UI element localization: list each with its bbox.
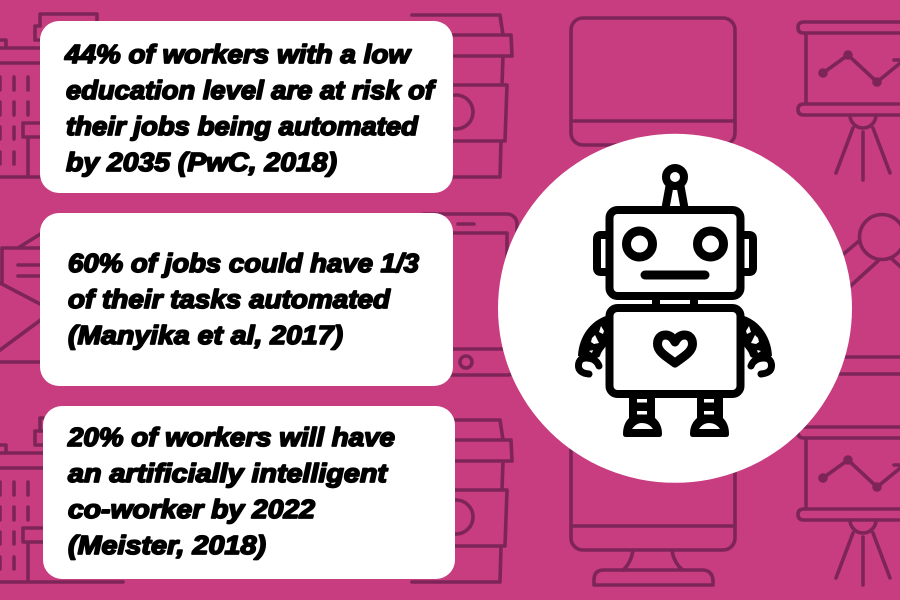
robot left leg (623, 396, 662, 437)
icon: building bottom (0, 418, 123, 582)
robot eyes (626, 231, 724, 257)
robot antenna (666, 168, 684, 208)
icon: monitor top (571, 18, 735, 145)
text: 60 percent statistic (68, 248, 420, 350)
panel: low education statistic (40, 21, 453, 193)
panel: AI co-worker statistic (43, 406, 455, 579)
text: 44 percent statistic (64, 39, 436, 177)
icon: envelope (0, 233, 42, 362)
text: 44 percent statistic: their jobs being automated (66, 111, 419, 141)
text: 60 percent statistic: of their tasks automated (68, 284, 391, 314)
text: 60 percent statistic: (Manyika et al, 2017) (68, 320, 343, 350)
text: 20 percent statistic: (Meister, 2018) (68, 530, 266, 560)
robot neck (652, 298, 698, 306)
text: 44 percent statistic: education level are at risk of (66, 75, 436, 105)
text: 44 percent statistic: 44% of workers with a low (64, 39, 412, 69)
robot ears (597, 235, 753, 272)
panel: robot circle (498, 134, 852, 483)
icon: presentation board bottom (798, 427, 900, 585)
icon: coffee cup top (400, 15, 512, 177)
text: 20 percent statistic: an artificially intelligent (68, 458, 388, 488)
icon: tablet (415, 214, 517, 375)
robot heart (658, 335, 692, 363)
text: 60 percent statistic: 60% of jobs could have 1/3 (68, 248, 420, 278)
text: 20 percent statistic: co-worker by 2022 (68, 494, 316, 524)
icon: network nodes (835, 214, 900, 374)
robot right arm (744, 316, 772, 374)
text: 20 percent statistic (67, 422, 395, 560)
robot right leg (690, 396, 729, 437)
text: 20 percent statistic: 20% of workers will have (67, 422, 395, 452)
robot left arm (578, 316, 606, 374)
icon: building top (0, 14, 97, 177)
robot head (610, 210, 740, 296)
text: 44 percent statistic: by 2035 (PwC, 2018) (66, 147, 337, 177)
icon: monitor bottom (571, 423, 735, 585)
robot body (610, 308, 740, 394)
icon: robot (578, 168, 772, 437)
robot mouth (645, 270, 705, 280)
icon: coffee cup bottom (400, 420, 512, 582)
icon: presentation board top (798, 22, 900, 180)
panel: tasks automated statistic (40, 213, 453, 386)
